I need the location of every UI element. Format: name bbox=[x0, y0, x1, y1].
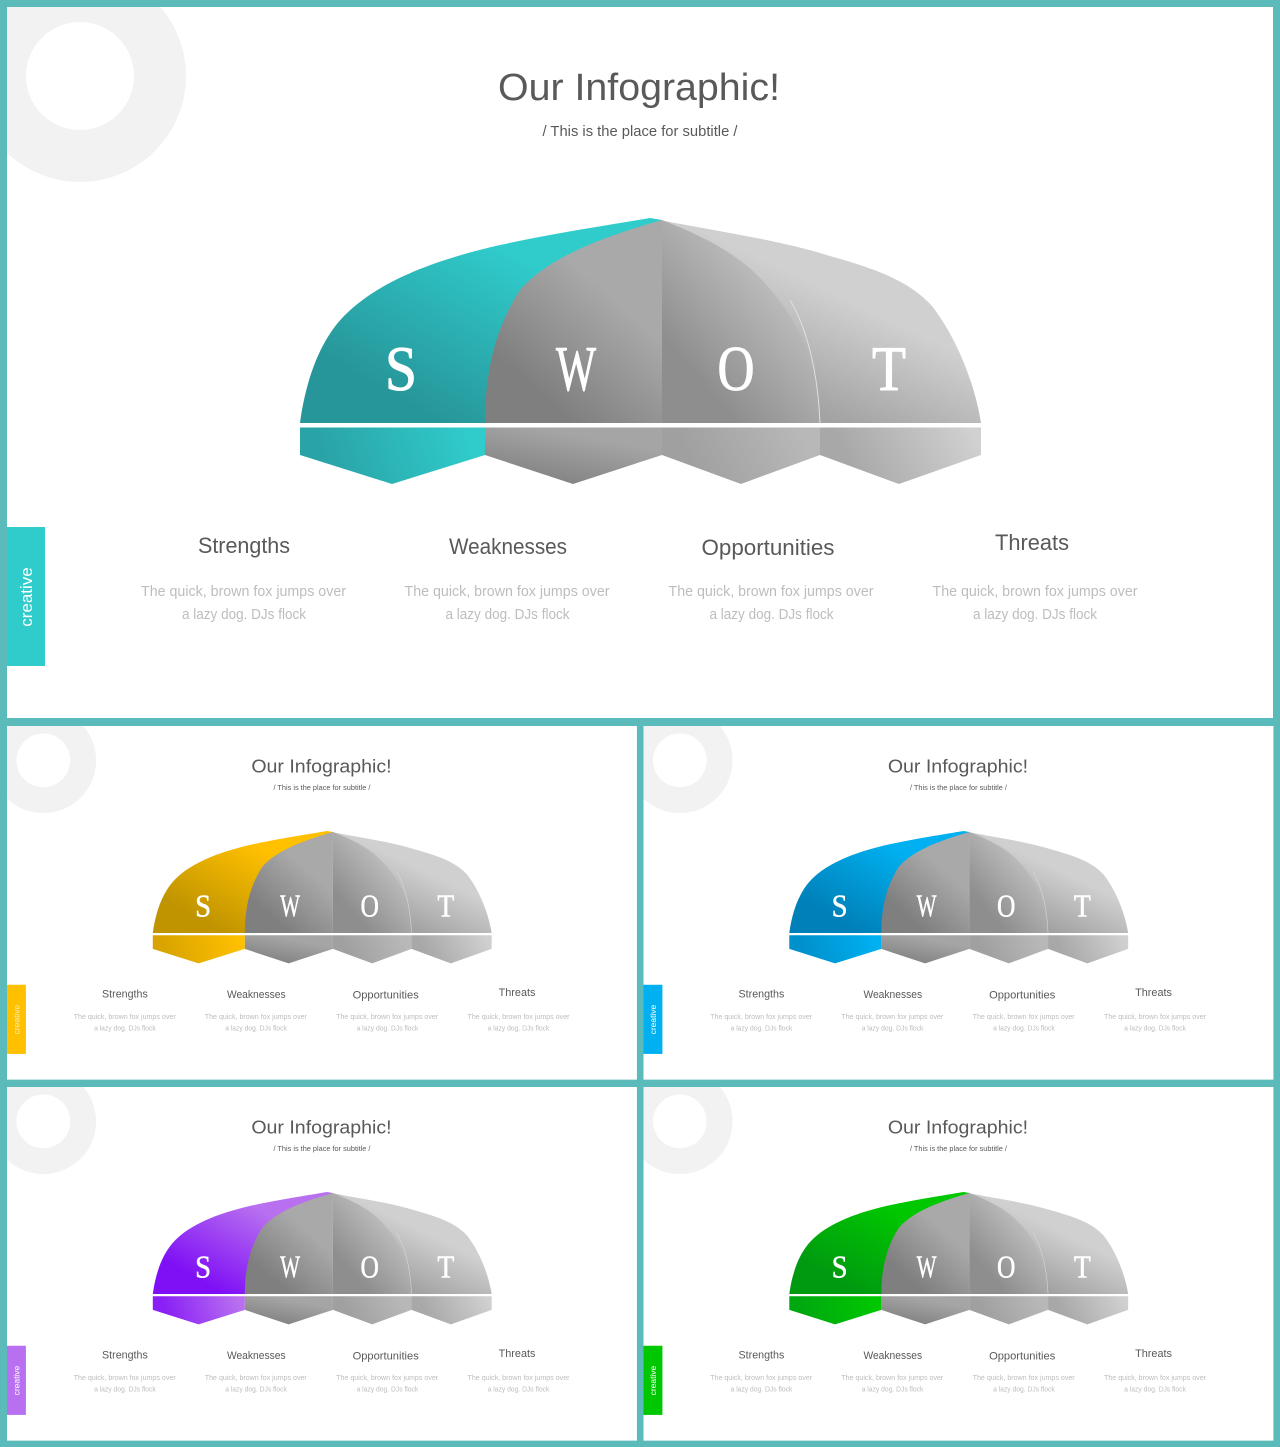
segment: S upper bbox=[153, 1192, 333, 1294]
letter T: T bbox=[437, 1250, 454, 1285]
column: Weaknesses bbox=[205, 1350, 307, 1394]
column: Strengths: The quick, brown fox jumps over bbox=[710, 1012, 813, 1021]
side tab: creative bbox=[648, 1366, 658, 1395]
subtitle: / This is the place for subtitle / bbox=[910, 1144, 1008, 1153]
segment: W lower bbox=[485, 428, 662, 484]
column: Weaknesses bbox=[205, 989, 307, 1033]
column: Threats: a lazy dog. DJs flock bbox=[488, 1385, 550, 1394]
column: Weaknesses: The quick, brown fox jumps over bbox=[205, 1373, 307, 1382]
panel: purple slide bbox=[0, 1069, 637, 1441]
column: Weaknesses: The quick, brown fox jumps over bbox=[404, 583, 610, 600]
column: Threats bbox=[1104, 987, 1207, 1033]
column: Threats bbox=[1104, 1348, 1207, 1394]
title: Our Infographic! bbox=[498, 67, 780, 109]
segment: O lower bbox=[662, 428, 820, 484]
segment: W lower bbox=[245, 935, 333, 963]
column: Threats: The quick, brown fox jumps over bbox=[932, 583, 1138, 600]
side tab: creative bbox=[11, 1366, 21, 1395]
title: Our Infographic! bbox=[888, 1117, 1028, 1138]
letter T: T bbox=[1074, 889, 1091, 924]
segment seam O/T bbox=[1033, 872, 1048, 933]
column: Threats bbox=[468, 1348, 570, 1394]
segment: S lower bbox=[153, 935, 245, 963]
segment: W lower bbox=[245, 1296, 333, 1324]
panel: main slide (teal) bbox=[0, 0, 1273, 718]
column: Weaknesses: a lazy dog. DJs flock bbox=[446, 606, 570, 623]
segment: T upper bbox=[968, 1193, 1128, 1294]
column: Strengths: a lazy dog. DJs flock bbox=[731, 1024, 793, 1033]
column: Threats: The quick, brown fox jumps over bbox=[468, 1012, 570, 1021]
column: Strengths: The quick, brown fox jumps over bbox=[710, 1373, 813, 1382]
segment: T lower bbox=[820, 428, 981, 484]
letter T: T bbox=[437, 889, 454, 924]
column: Weaknesses: The quick, brown fox jumps over bbox=[841, 1373, 944, 1382]
side tab: creative bbox=[17, 567, 36, 627]
segment: S lower bbox=[153, 1296, 245, 1324]
column: Weaknesses: a lazy dog. DJs flock bbox=[225, 1024, 287, 1033]
column: Strengths bbox=[710, 989, 813, 1033]
white divider bbox=[153, 1294, 492, 1296]
segment: O lower bbox=[969, 935, 1048, 963]
subtitle: / This is the place for subtitle / bbox=[910, 783, 1008, 792]
column: Threats: The quick, brown fox jumps over bbox=[468, 1373, 570, 1382]
column: Weaknesses: Weaknesses bbox=[863, 1350, 923, 1362]
SWOT dome chart bbox=[153, 1192, 492, 1324]
column: Opportunities: Opportunities bbox=[989, 1351, 1056, 1363]
segment: S lower bbox=[789, 1296, 881, 1324]
column: Threats: Threats bbox=[1135, 1348, 1172, 1360]
segment: W upper bbox=[245, 832, 333, 933]
segment seam O/T bbox=[397, 1233, 412, 1294]
side tab bbox=[7, 1346, 26, 1415]
column: Opportunities: Opportunities bbox=[353, 1351, 419, 1363]
side tab bbox=[644, 1346, 662, 1415]
column: Strengths: Strengths bbox=[739, 989, 785, 1001]
segment: S upper bbox=[300, 218, 662, 423]
column: Threats: a lazy dog. DJs flock bbox=[488, 1024, 550, 1033]
title: Our Infographic! bbox=[251, 756, 392, 777]
column: Threats: The quick, brown fox jumps over bbox=[1104, 1373, 1207, 1382]
segment: S upper bbox=[153, 831, 333, 933]
letter W: W bbox=[556, 333, 596, 404]
column: Weaknesses: The quick, brown fox jumps over bbox=[205, 1012, 307, 1021]
decorative ring bbox=[627, 708, 733, 813]
segment: T upper bbox=[332, 1193, 492, 1294]
letter W: W bbox=[280, 1250, 300, 1285]
column: Opportunities: Opportunities bbox=[989, 990, 1056, 1002]
column: Weaknesses: a lazy dog. DJs flock bbox=[225, 1385, 287, 1394]
SWOT dome chart bbox=[789, 1192, 1128, 1324]
column: Opportunities: a lazy dog. DJs flock bbox=[357, 1385, 419, 1394]
side tab: creative bbox=[648, 1005, 658, 1034]
column: Threats: a lazy dog. DJs flock bbox=[973, 606, 1097, 623]
decorative ring bbox=[7, 726, 96, 813]
segment: T lower bbox=[412, 935, 492, 963]
segment: O upper bbox=[969, 1193, 1048, 1294]
panel: yellow slide bbox=[0, 708, 637, 1080]
side tab: creative bbox=[11, 1005, 21, 1034]
segment: W upper bbox=[485, 220, 662, 423]
column: Threats: a lazy dog. DJs flock bbox=[1124, 1024, 1186, 1033]
column: Weaknesses: Weaknesses bbox=[863, 989, 923, 1001]
column: Opportunities: a lazy dog. DJs flock bbox=[357, 1024, 419, 1033]
column: Strengths: The quick, brown fox jumps over bbox=[141, 583, 346, 600]
letter O: O bbox=[997, 1250, 1015, 1285]
column: Opportunities: Opportunities bbox=[702, 535, 834, 560]
SWOT dome chart bbox=[300, 218, 981, 484]
column: Opportunities: a lazy dog. DJs flock bbox=[710, 606, 834, 623]
segment: T upper bbox=[332, 832, 492, 933]
column: Opportunities: The quick, brown fox jumps over bbox=[336, 1373, 439, 1382]
segment: S upper bbox=[789, 831, 969, 933]
column: Opportunities: The quick, brown fox jumps over bbox=[973, 1012, 1075, 1021]
column: Strengths: The quick, brown fox jumps over bbox=[74, 1012, 176, 1021]
column: Strengths bbox=[710, 1350, 813, 1394]
column: Threats: Threats bbox=[499, 1348, 536, 1360]
column: Strengths: Strengths bbox=[739, 1350, 785, 1362]
white divider bbox=[300, 423, 981, 428]
column: Opportunities bbox=[336, 1351, 439, 1394]
segment: W lower bbox=[881, 1296, 969, 1324]
segment: T lower bbox=[1048, 1296, 1128, 1324]
column: Weaknesses: a lazy dog. DJs flock bbox=[862, 1385, 924, 1394]
letter O: O bbox=[361, 1250, 379, 1285]
column: Threats bbox=[468, 987, 570, 1033]
column: Strengths bbox=[141, 533, 346, 623]
segment: T upper bbox=[660, 220, 981, 423]
column: Opportunities: The quick, brown fox jumps over bbox=[336, 1012, 439, 1021]
segment: T lower bbox=[1048, 935, 1128, 963]
letter S: S bbox=[832, 1250, 848, 1285]
column: Opportunities: a lazy dog. DJs flock bbox=[993, 1385, 1055, 1394]
title: Our Infographic! bbox=[888, 756, 1028, 777]
column: Opportunities bbox=[973, 1351, 1075, 1394]
column: Strengths: Strengths bbox=[102, 989, 148, 1001]
column: Strengths: a lazy dog. DJs flock bbox=[182, 606, 306, 623]
column: Opportunities bbox=[973, 990, 1075, 1033]
column: Weaknesses: Weaknesses bbox=[449, 534, 567, 559]
title: Our Infographic! bbox=[251, 1117, 392, 1138]
column: Weaknesses bbox=[841, 1350, 944, 1394]
segment: O upper bbox=[333, 1193, 412, 1294]
side tab bbox=[7, 527, 45, 666]
column: Strengths bbox=[74, 989, 176, 1033]
column: Opportunities bbox=[668, 535, 874, 623]
letter S: S bbox=[195, 1250, 211, 1285]
column: Weaknesses: Weaknesses bbox=[227, 989, 286, 1001]
column: Opportunities: Opportunities bbox=[353, 990, 419, 1002]
column: Threats: Threats bbox=[1135, 987, 1172, 999]
column: Strengths: Strengths bbox=[102, 1350, 148, 1362]
column: Opportunities: The quick, brown fox jumps over bbox=[668, 583, 874, 600]
column: Strengths: a lazy dog. DJs flock bbox=[94, 1385, 156, 1394]
column: Threats: The quick, brown fox jumps over bbox=[1104, 1012, 1207, 1021]
white divider bbox=[789, 1294, 1128, 1296]
column: Threats: Threats bbox=[499, 987, 536, 999]
column: Strengths: a lazy dog. DJs flock bbox=[94, 1024, 156, 1033]
decorative ring bbox=[627, 1069, 733, 1174]
white divider bbox=[789, 933, 1128, 935]
segment: W upper bbox=[881, 832, 969, 933]
column: Strengths: a lazy dog. DJs flock bbox=[731, 1385, 793, 1394]
white divider bbox=[153, 933, 492, 935]
segment: O lower bbox=[969, 1296, 1048, 1324]
subtitle: / This is the place for subtitle / bbox=[542, 123, 738, 140]
segment: O upper bbox=[333, 832, 396, 933]
column: Weaknesses: The quick, brown fox jumps over bbox=[841, 1012, 944, 1021]
column: Weaknesses: a lazy dog. DJs flock bbox=[862, 1024, 924, 1033]
segment: S upper bbox=[789, 1192, 969, 1294]
letter O: O bbox=[361, 889, 379, 924]
decorative ring bbox=[0, 0, 186, 182]
segment: T upper bbox=[968, 832, 1128, 933]
side tab bbox=[644, 985, 662, 1054]
segment: O upper bbox=[662, 220, 788, 423]
letter W: W bbox=[280, 889, 300, 924]
column: Weaknesses: Weaknesses bbox=[227, 1350, 286, 1362]
segment: O upper bbox=[969, 832, 1048, 933]
letter O: O bbox=[997, 889, 1015, 924]
letter T: T bbox=[1074, 1250, 1091, 1285]
segment: S lower bbox=[789, 935, 881, 963]
segment: O lower bbox=[333, 935, 412, 963]
letter O: O bbox=[718, 333, 754, 404]
letter S: S bbox=[385, 333, 417, 404]
column: Opportunities: a lazy dog. DJs flock bbox=[993, 1024, 1055, 1033]
subtitle: / This is the place for subtitle / bbox=[273, 1144, 371, 1153]
decorative ring bbox=[0, 1069, 96, 1174]
segment: T lower bbox=[412, 1296, 492, 1324]
segment seam O/T bbox=[397, 872, 412, 933]
panel: green slide bbox=[627, 1069, 1273, 1441]
column: Threats: a lazy dog. DJs flock bbox=[1124, 1385, 1186, 1394]
segment: S lower bbox=[300, 428, 485, 484]
letter S: S bbox=[195, 889, 211, 924]
column: Threats bbox=[932, 530, 1138, 623]
column: Strengths: Strengths bbox=[198, 533, 290, 558]
letter S: S bbox=[832, 889, 848, 924]
letter W: W bbox=[917, 1250, 937, 1285]
subtitle: / This is the place for subtitle / bbox=[273, 783, 371, 792]
side tab bbox=[7, 985, 26, 1054]
letter T: T bbox=[872, 333, 906, 404]
column: Opportunities bbox=[336, 990, 439, 1033]
column: Strengths: The quick, brown fox jumps over bbox=[74, 1373, 176, 1382]
column: Opportunities: The quick, brown fox jumps over bbox=[973, 1373, 1075, 1382]
SWOT dome chart bbox=[789, 831, 1128, 963]
column: Threats: Threats bbox=[995, 530, 1069, 555]
segment: W lower bbox=[881, 935, 969, 963]
SWOT dome chart bbox=[153, 831, 492, 963]
segment: W upper bbox=[881, 1193, 969, 1294]
segment seam O/T bbox=[1033, 1233, 1048, 1294]
letter W: W bbox=[917, 889, 937, 924]
segment seam O/T bbox=[790, 300, 820, 423]
column: Weaknesses bbox=[404, 534, 610, 623]
column: Strengths bbox=[74, 1350, 176, 1394]
segment: O lower bbox=[333, 1296, 412, 1324]
segment: W upper bbox=[245, 1193, 333, 1294]
panel: blue slide bbox=[627, 708, 1273, 1080]
column: Weaknesses bbox=[841, 989, 944, 1033]
